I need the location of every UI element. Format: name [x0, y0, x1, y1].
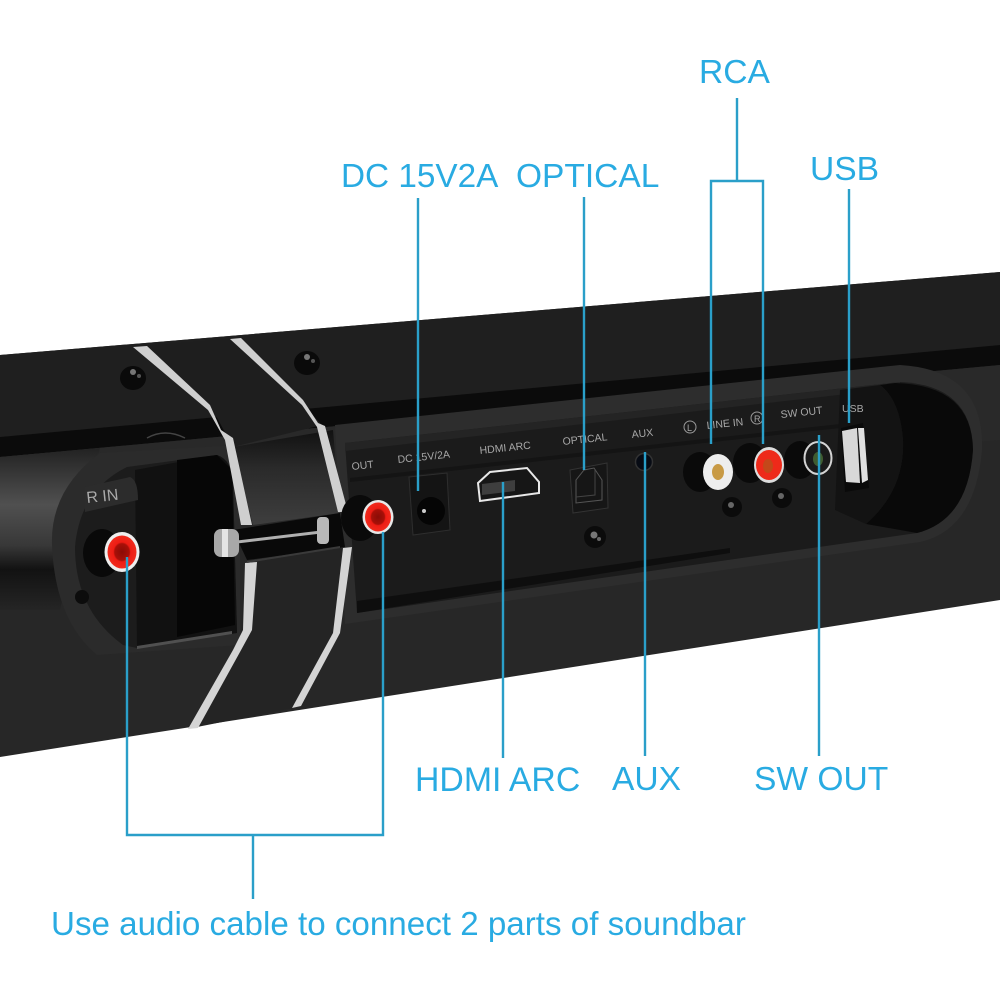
port: RCA R IN [83, 529, 140, 577]
port: RCA right red [733, 443, 784, 483]
panel label: R IN [85, 477, 138, 512]
panel label: L: L [687, 423, 692, 433]
label: DC 15V2A: DC 15V2A [341, 158, 499, 195]
screw: optical [584, 526, 606, 548]
port: SW OUT [784, 441, 832, 479]
leader: HDMI ARC [502, 482, 504, 758]
leader: AUX [644, 452, 646, 756]
screw: left RCA [722, 497, 742, 517]
left end recess [52, 445, 240, 655]
port: RCA OUT [341, 495, 394, 541]
main connector panel [335, 365, 982, 624]
screw: right RCA [772, 488, 792, 508]
label: HDMI ARC: HDMI ARC [415, 761, 580, 799]
port: optical [570, 463, 608, 513]
label: RCA: RCA [699, 54, 770, 91]
panel label: R IN: R IN [86, 487, 119, 507]
port: USB [841, 423, 869, 492]
screw: top right [294, 351, 320, 375]
panel label: HDMI ARC: HDMI ARC [479, 440, 532, 457]
screw: left recess [75, 590, 89, 604]
panel label: OUT: OUT [351, 459, 375, 473]
panel label: USB: USB [842, 403, 864, 415]
panel label: LINE IN: LINE IN [706, 416, 744, 432]
screw: top left [120, 366, 146, 390]
label: cable caption: Use audio cable to connect 2 parts of soundbar [51, 906, 746, 943]
panel label: R [751, 412, 763, 424]
port: AUX [636, 454, 652, 470]
leader: RCA [711, 98, 763, 444]
hinge pin [214, 513, 345, 563]
silver strap: lower left [188, 562, 257, 729]
panel label: SW OUT: SW OUT [780, 405, 824, 421]
leader: audio cable connector [127, 532, 383, 899]
leader: OPTICAL [583, 197, 585, 470]
port: RCA left white [683, 452, 733, 492]
label: AUX: AUX [612, 761, 681, 798]
label: OPTICAL: OPTICAL [516, 158, 659, 195]
soundbar body [0, 272, 1000, 757]
leader: USB [848, 189, 850, 423]
leader: DC [417, 198, 419, 491]
port: HDMI [478, 468, 539, 501]
silver strap: right [230, 338, 348, 512]
label: USB: USB [810, 151, 879, 188]
panel label: AUX: AUX [631, 427, 654, 441]
panel label: OPTICAL: OPTICAL [562, 431, 608, 448]
small dome above left recess [147, 433, 185, 438]
panel label: L [684, 421, 696, 433]
port: DC jack [409, 473, 450, 535]
silver strap: left [133, 346, 252, 525]
label: SW OUT: SW OUT [754, 761, 888, 798]
hinge bracket [133, 338, 352, 729]
silver strap: lower right [292, 547, 352, 708]
panel label: DC 15V/2A: DC 15V/2A [397, 449, 451, 466]
leader: SW OUT [818, 435, 820, 756]
panel label: R: R [754, 414, 761, 424]
